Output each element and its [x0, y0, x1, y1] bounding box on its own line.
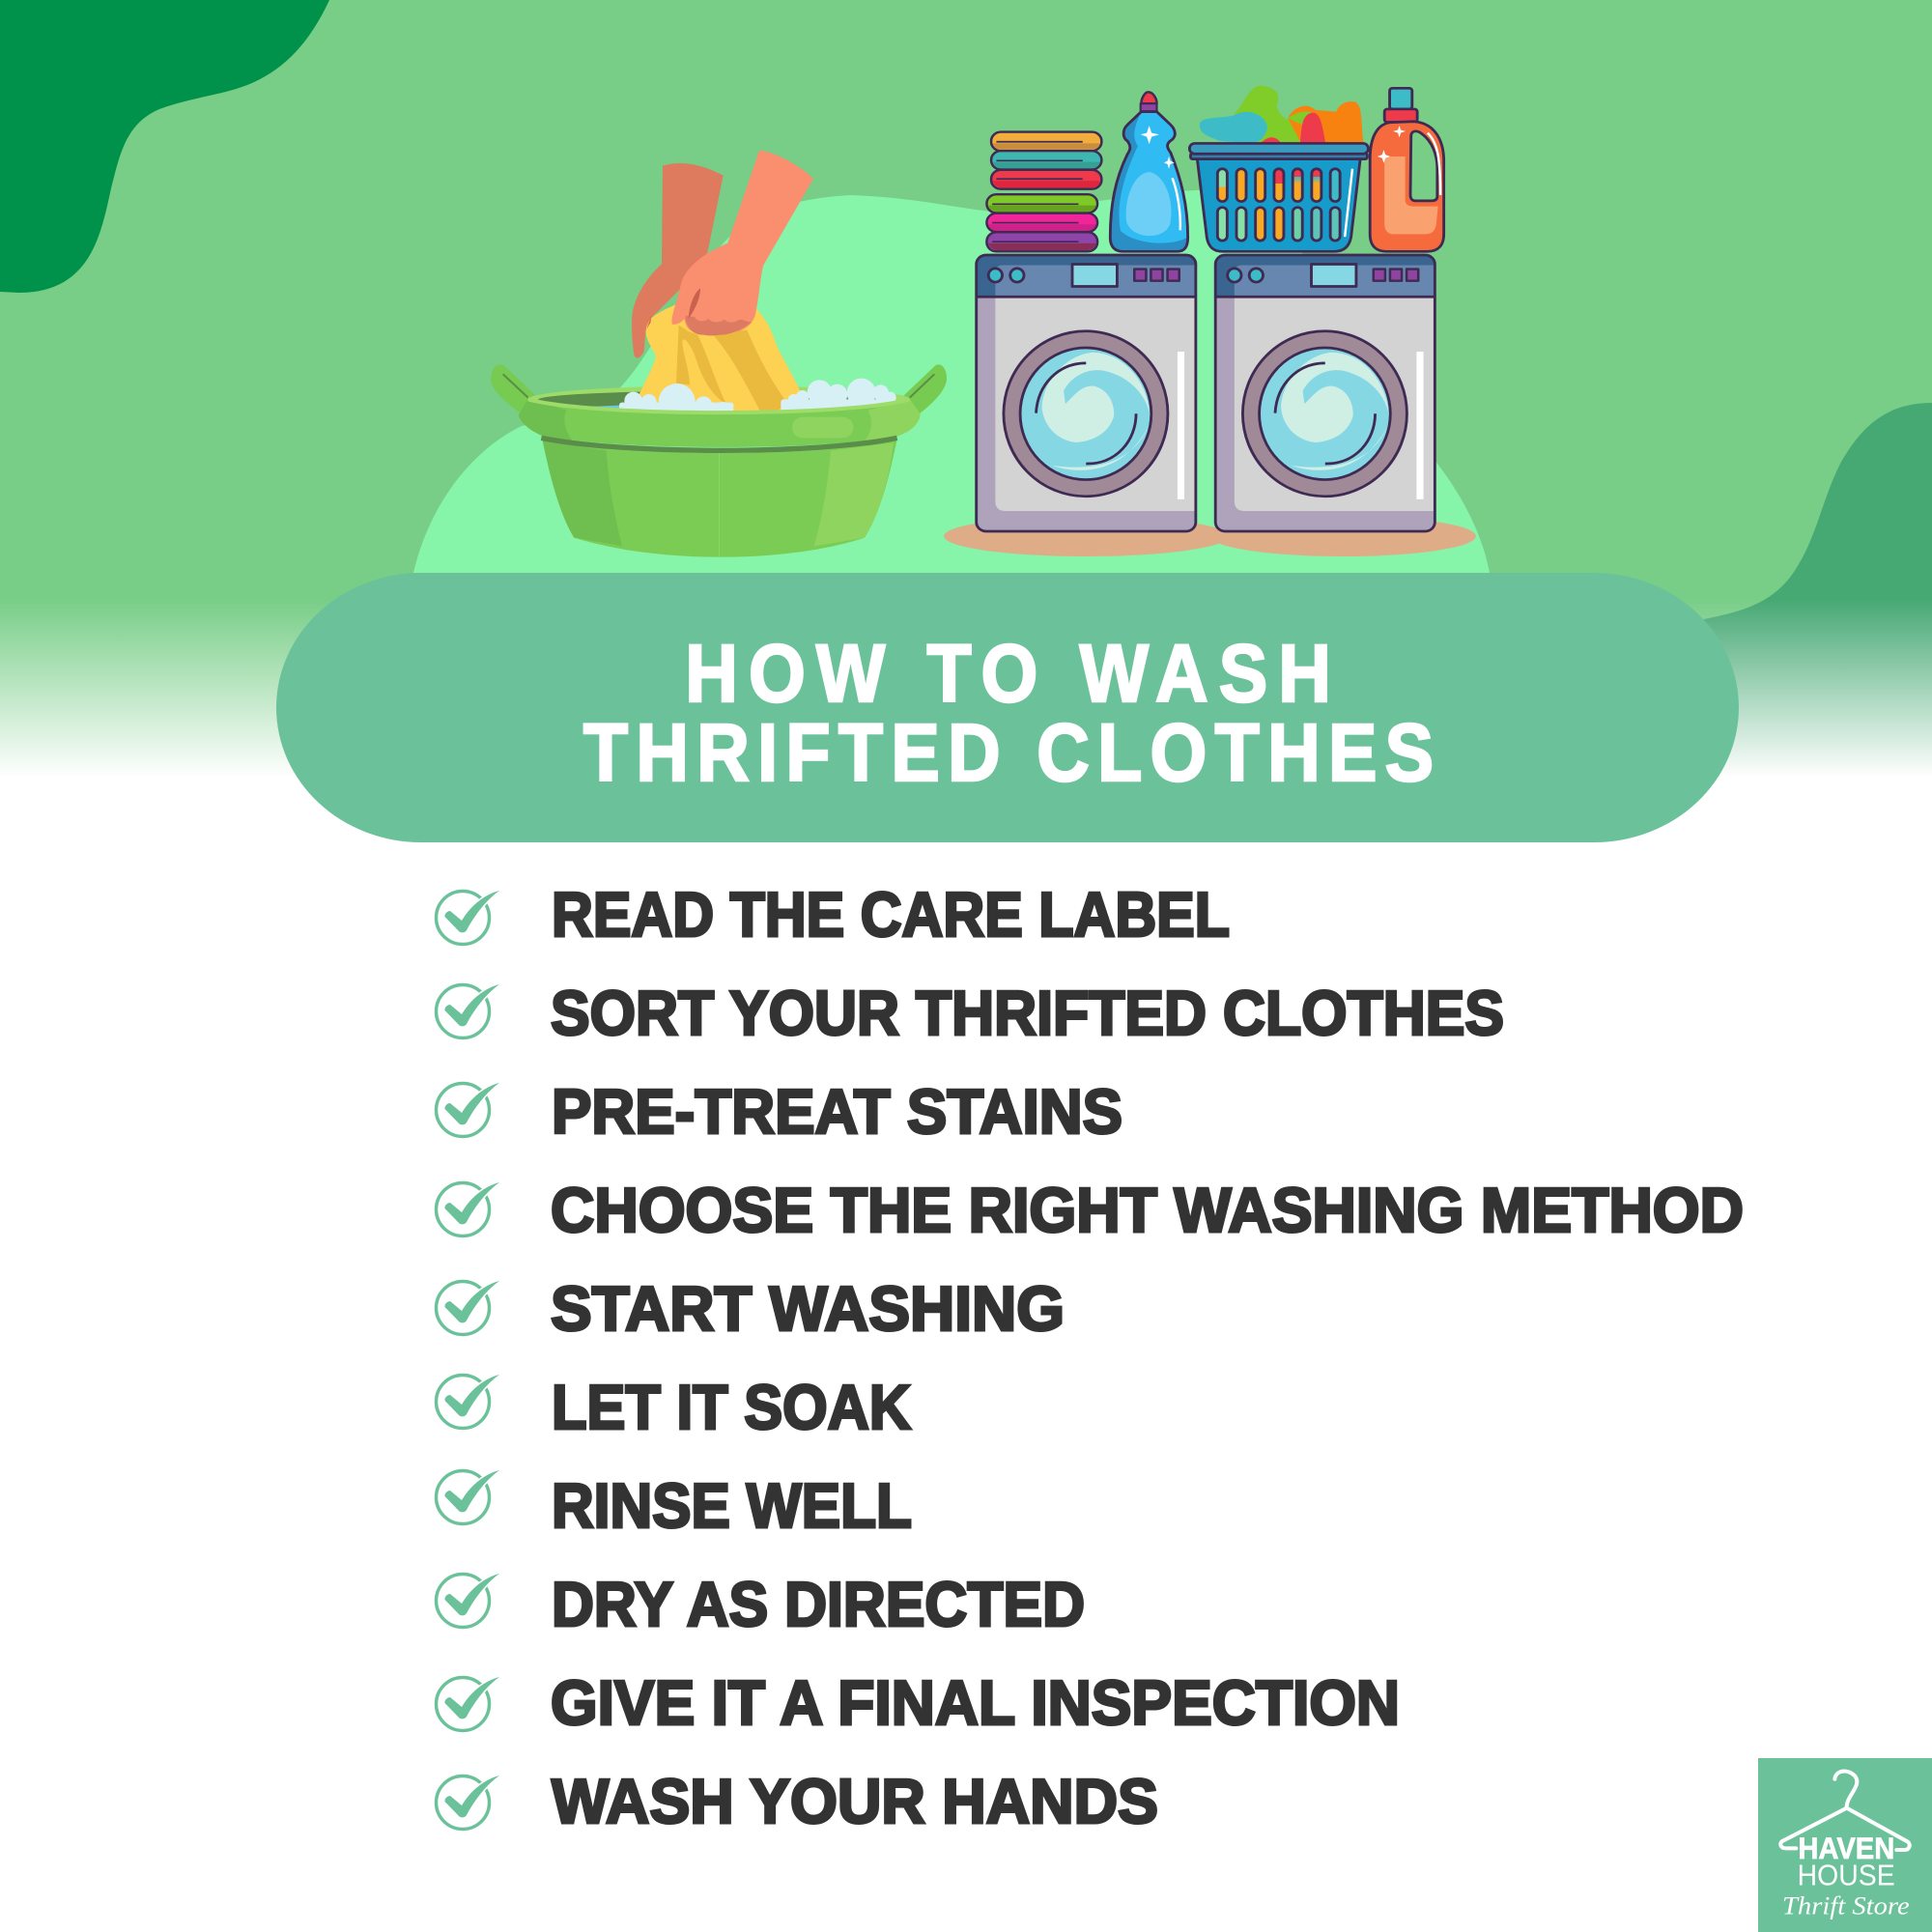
icon: check 8: [437, 1574, 499, 1627]
logo text: HAVEN: [1798, 1832, 1894, 1865]
yellow cloth: [639, 304, 800, 411]
title: HOW TO WASH: [685, 628, 1331, 719]
icon: check 6: [437, 1375, 499, 1428]
title pill: [276, 573, 1739, 842]
icon: check 7: [437, 1470, 499, 1524]
logo: Haven House Thrift Store: [1758, 1758, 1932, 1932]
washing machine right: [1215, 255, 1435, 531]
icon: check 1: [437, 891, 499, 945]
folded towels: [986, 132, 1101, 251]
blob: top left dark green: [0, 0, 329, 293]
soap foam: [619, 379, 896, 422]
detergent jug orange: [1370, 88, 1444, 251]
washing machine left: [977, 255, 1196, 531]
step 2: SORT YOUR THRIFTED CLOTHES: [551, 978, 1504, 1048]
back hand: [632, 163, 724, 357]
step 9: GIVE IT A FINAL INSPECTION: [551, 1667, 1400, 1738]
illustration: hands washing in tub: [491, 151, 947, 557]
step 7: RINSE WELL: [552, 1470, 912, 1541]
title: [583, 628, 1434, 798]
blob: right mid green: [1642, 403, 1932, 802]
step 6: LET IT SOAK: [552, 1372, 911, 1442]
icon: check 10: [437, 1776, 499, 1830]
icon: check 3: [437, 1083, 499, 1136]
icon: check 5: [437, 1281, 499, 1335]
illustration: washing machines and laundry: [944, 86, 1476, 556]
detergent bottle blue: [1110, 92, 1188, 251]
tub handles: [491, 364, 947, 413]
icon: check 9: [437, 1677, 499, 1731]
white lower background: [0, 778, 1932, 1932]
water: [589, 405, 625, 411]
logo text: [1782, 1832, 1910, 1920]
icon: check 4: [437, 1182, 499, 1236]
step 3: PRE-TREAT STAINS: [552, 1076, 1122, 1147]
icon: hanger: [1780, 1772, 1910, 1850]
tub interior: [538, 391, 895, 409]
step 1: READ THE CARE LABEL: [552, 879, 1230, 950]
notch on back hand: [646, 316, 651, 329]
laundry basket: [1189, 143, 1368, 251]
blob: light mint behind illustrations: [413, 190, 1490, 573]
step 5: START WASHING: [551, 1273, 1065, 1344]
step 4: CHOOSE THE RIGHT WASHING METHOD: [551, 1175, 1744, 1245]
white fade overlay: [0, 599, 1932, 778]
checklist: [437, 879, 1744, 1836]
icon: check 2: [437, 984, 499, 1037]
laundry clothes in basket: [1200, 86, 1364, 144]
logo text: HOUSE: [1798, 1860, 1895, 1892]
step 8: DRY AS DIRECTED: [552, 1569, 1085, 1639]
tub body: [541, 438, 897, 557]
floor shadows: [944, 516, 1476, 556]
logo text: Thrift Store: [1782, 1891, 1910, 1920]
title: THRIFTED CLOTHES: [583, 707, 1434, 798]
tub rim: [528, 385, 910, 412]
green background: [0, 0, 1932, 802]
front hand: [671, 151, 813, 335]
tub collar: [519, 399, 921, 447]
step 10: WASH YOUR HANDS: [552, 1766, 1158, 1836]
